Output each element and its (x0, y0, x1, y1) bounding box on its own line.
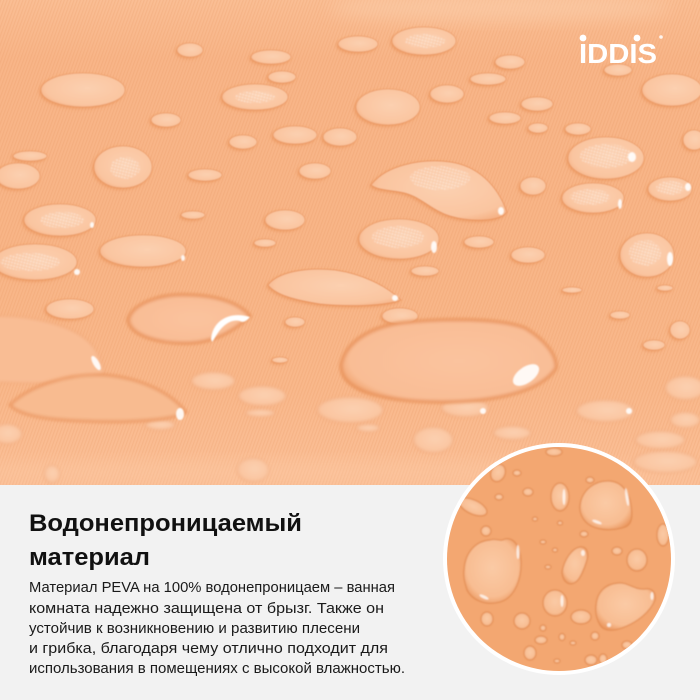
heading: материал (29, 544, 150, 571)
inset drop: left (464, 539, 521, 603)
highlights on drops (0, 34, 691, 420)
body text: устойчив к возникновению и развитию плесени (29, 621, 360, 637)
large drop: lower centre (341, 320, 556, 402)
background photo: wet orange fabric with water drops (0, 0, 700, 485)
logo: iddis (580, 34, 663, 64)
large drop: right middle (268, 269, 401, 306)
body text: и грибка, благодаря чему отлично подходит для (29, 641, 388, 657)
heading: Водонепроницаемый (29, 510, 302, 537)
inset drop: upper right (580, 481, 632, 530)
inset drop: lower right (596, 583, 655, 630)
logo: iddis: IDDIS (579, 38, 657, 69)
inset drop: centre elongated (562, 547, 588, 584)
body text: комната надежно защищена от брызг. Также он (29, 601, 384, 617)
large drop: upper centre (371, 161, 507, 220)
large drop: lower left (10, 375, 186, 422)
body text: использования в помещениях с высокой влажностью. (29, 661, 405, 677)
bottom info panel (0, 485, 700, 700)
body text (29, 580, 405, 677)
large drop: left edge (0, 316, 104, 383)
heading (29, 510, 302, 571)
circular inset: close-up of water drops (443, 443, 675, 675)
body text: Материал PEVA на 100% водонепроницаем – ванная (29, 580, 395, 596)
large drop: crescent highlight (128, 295, 250, 343)
